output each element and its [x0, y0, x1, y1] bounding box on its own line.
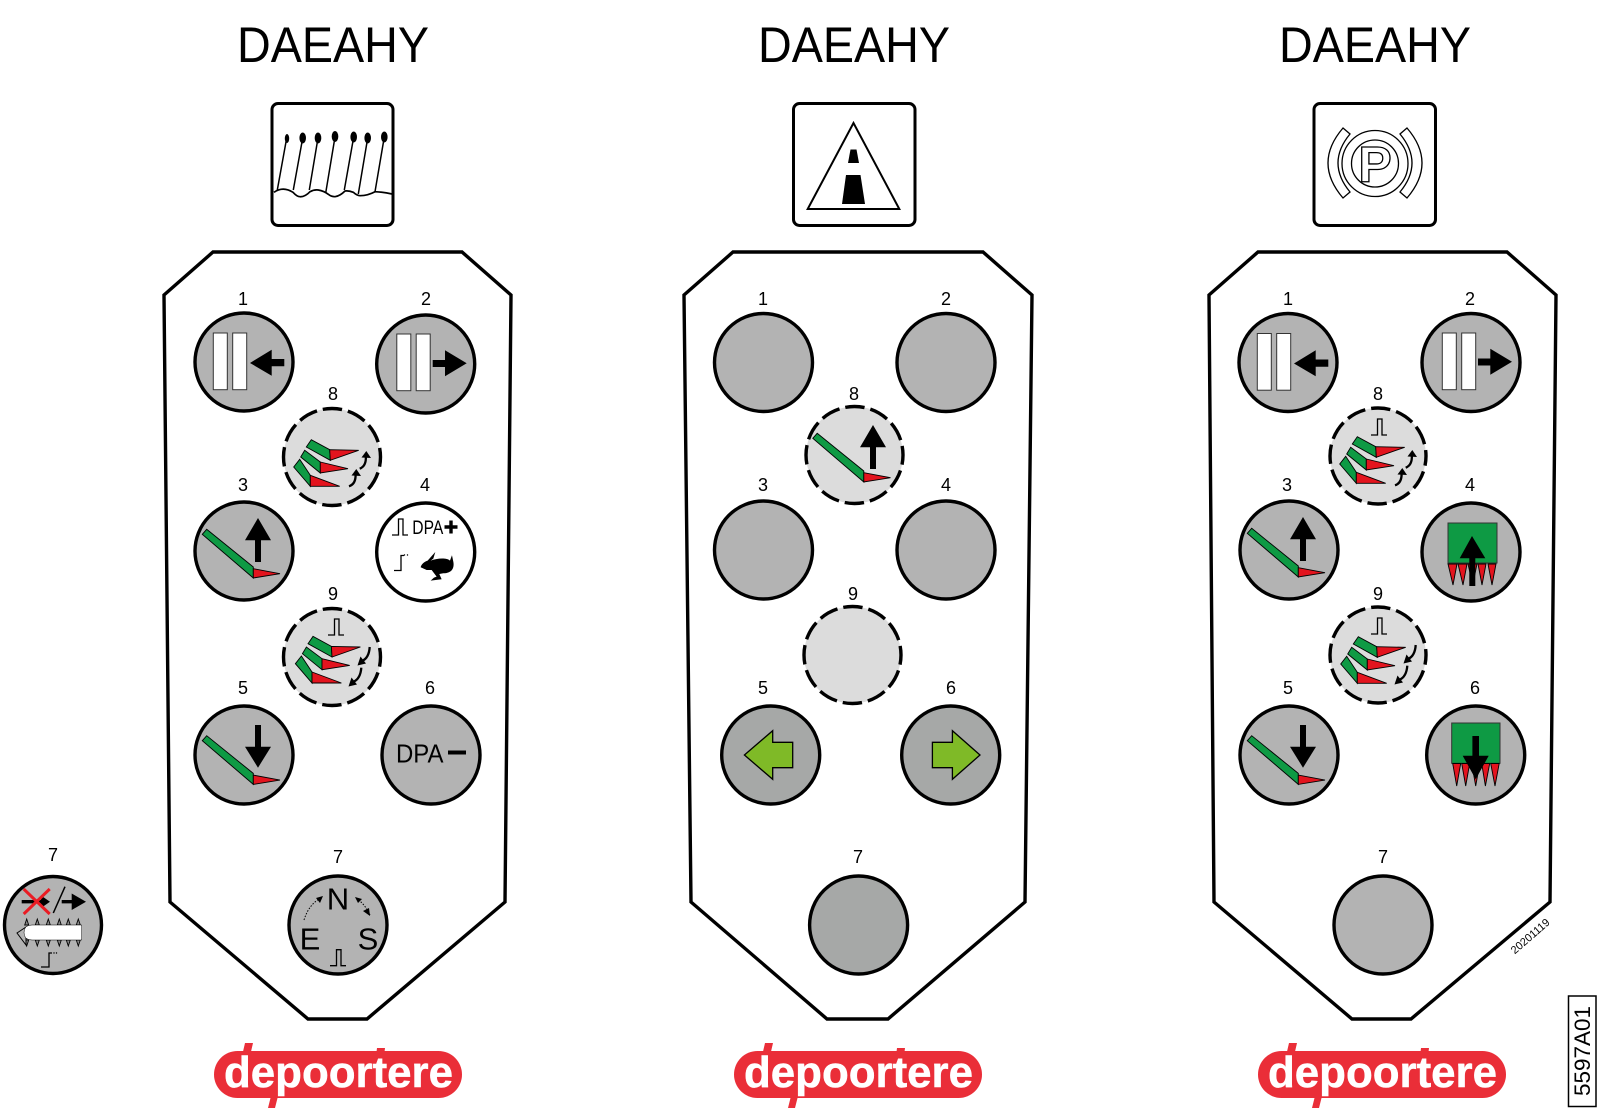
- button 8: 8: [849, 384, 859, 404]
- button 3: [714, 475, 812, 599]
- button 6: DPA: [396, 739, 444, 769]
- button 5: [1240, 678, 1338, 804]
- button 7: compass: N: [327, 881, 349, 916]
- logo: depoortere: depoortere: [744, 1048, 973, 1097]
- title: DAEAHY: [758, 17, 950, 73]
- icon: parking brake: [1314, 104, 1436, 226]
- side button: alternate 7: [4, 845, 102, 974]
- button 5: [195, 678, 293, 804]
- button 2: [897, 289, 995, 412]
- button 4: 4: [941, 475, 951, 495]
- button 9: [1330, 584, 1426, 703]
- button 3: 3: [238, 475, 248, 495]
- button 9: [804, 584, 901, 704]
- button 1: 1: [1283, 289, 1293, 309]
- button 2: 2: [421, 289, 431, 309]
- button 9: 9: [848, 584, 858, 604]
- button 7: [810, 847, 908, 974]
- button 2: [1422, 289, 1520, 412]
- button 8: [284, 384, 380, 506]
- logo: depoortere: [734, 1043, 982, 1108]
- button 5: 5: [238, 678, 248, 698]
- button 7: 7: [853, 847, 863, 867]
- icon: road warning triangle: [794, 104, 915, 226]
- button 7: compass: [289, 847, 387, 974]
- button 6: [382, 678, 480, 804]
- button 3: 3: [1282, 475, 1292, 495]
- button 3: [1240, 475, 1338, 599]
- side button: alternate 7: 7: [48, 845, 58, 865]
- icon: parking brake: P: [1358, 136, 1392, 192]
- button 9: 9: [1373, 584, 1383, 604]
- panel: left remote: [164, 17, 511, 1108]
- button 7: compass: 7: [333, 847, 343, 867]
- button 4: [1422, 475, 1520, 601]
- button 9: [284, 584, 380, 706]
- button 5: 5: [1283, 678, 1293, 698]
- logo: depoortere: depoortere: [1268, 1048, 1497, 1097]
- button 6: 6: [946, 678, 956, 698]
- button 1: 1: [238, 289, 248, 309]
- button 1: [1239, 289, 1337, 412]
- button 9: 9: [328, 584, 338, 604]
- button 4: [377, 475, 475, 601]
- remote outline: [1209, 252, 1556, 1019]
- button 3: [195, 475, 293, 600]
- icon: crop stalks on ground: [272, 104, 393, 226]
- button 6: 6: [1470, 678, 1480, 698]
- part number box: 5597A01: [1570, 1006, 1595, 1096]
- logo: depoortere: depoortere: [224, 1048, 453, 1097]
- button 7: compass: S: [358, 921, 378, 956]
- button 7: [1334, 847, 1432, 974]
- button 8: 8: [1373, 384, 1383, 404]
- button 6: [1427, 678, 1525, 804]
- title: DAEAHY: [1279, 17, 1471, 73]
- button 8: [806, 384, 903, 504]
- button 1: [714, 289, 812, 412]
- button 1: [195, 289, 293, 411]
- button 2: [377, 289, 475, 413]
- panel: middle remote: [684, 17, 1032, 1108]
- button 4: 4: [420, 475, 430, 495]
- button 5: [722, 678, 820, 804]
- button 8: 8: [328, 384, 338, 404]
- logo: depoortere: [1258, 1043, 1506, 1108]
- button 4: 4: [1465, 475, 1475, 495]
- title: DAEAHY: [237, 17, 429, 73]
- button 6: 6: [425, 678, 435, 698]
- remote outline: [684, 252, 1032, 1019]
- button 7: compass: E: [300, 921, 320, 956]
- button 7: 7: [1378, 847, 1388, 867]
- logo: depoortere: [214, 1043, 462, 1108]
- button 4: DPA: [412, 518, 444, 539]
- button 3: 3: [758, 475, 768, 495]
- button 6: [902, 678, 1000, 804]
- button 2: 2: [941, 289, 951, 309]
- button 4: [897, 475, 995, 599]
- button 2: 2: [1465, 289, 1475, 309]
- button 8: [1330, 384, 1426, 504]
- button 5: 5: [758, 678, 768, 698]
- date code: 20201119: [1509, 917, 1552, 957]
- button 1: 1: [758, 289, 768, 309]
- panel: right remote: [1209, 17, 1556, 1108]
- remote outline: [164, 252, 511, 1019]
